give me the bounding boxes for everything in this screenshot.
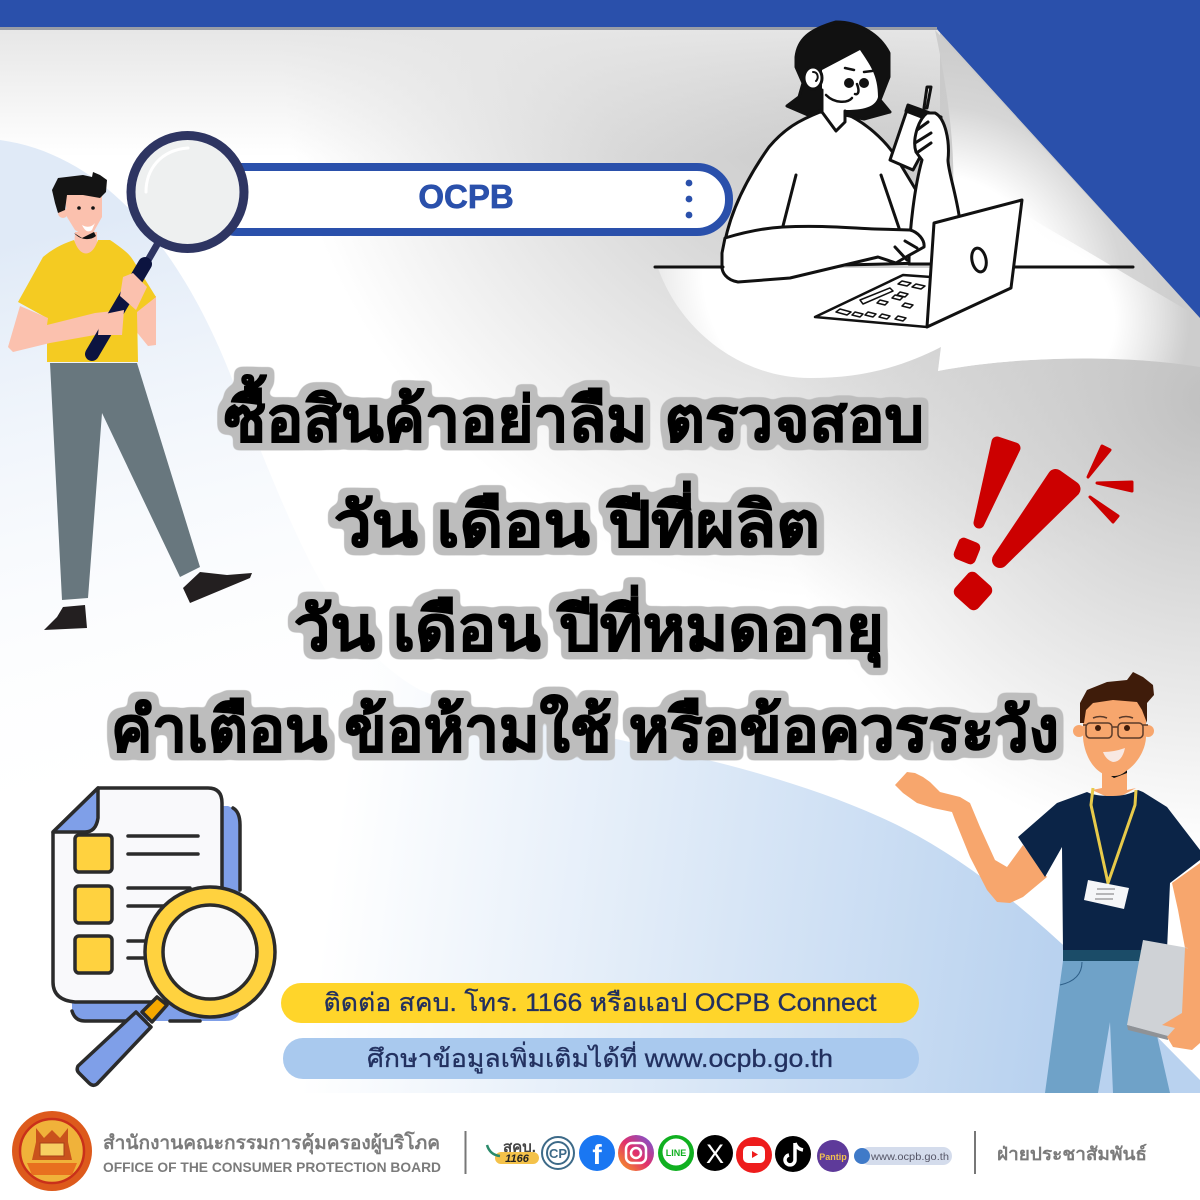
footer <box>0 1093 1200 1200</box>
raised arm <box>895 772 1047 903</box>
lanyard and badge <box>1091 788 1136 883</box>
icon: pantip: Pantip <box>819 1152 847 1162</box>
heading: ซื้อสินค้าอย่าลืม ตรวจสอบ <box>224 374 924 455</box>
shoes <box>44 572 252 630</box>
heading: วัน เดือน ปีที่ผลิต <box>334 481 820 560</box>
near arm <box>8 306 122 352</box>
icon: OCPB connect <box>542 1137 574 1169</box>
shirt <box>1018 790 1200 950</box>
head <box>1102 770 1127 778</box>
jeans <box>1045 961 1170 1093</box>
icon: line: LINE <box>666 1148 686 1158</box>
heading: คำเตือน ข้อห้ามใช้ หรือข้อควรระวัง <box>111 694 1059 765</box>
icon: checklist with magnifier <box>53 788 275 1085</box>
agency name English: OFFICE OF THE CONSUMER PROTECTION BOARD <box>103 1159 441 1175</box>
icon: OCPB seal <box>12 1111 92 1191</box>
top blue band and corner <box>0 0 1200 318</box>
page curl <box>658 30 1200 378</box>
yellow shirt <box>18 240 156 362</box>
website badge: www.ocpb.go.th <box>870 1152 949 1163</box>
website pill: ศึกษาข้อมูลเพิ่มเติมได้ที่ www.ocpb.go.th <box>367 1041 833 1074</box>
agency name Thai: สำนักงานคณะกรรมการคุ้มครองผู้บริโภค <box>103 1131 440 1155</box>
icon: exclamation marks <box>953 442 1132 611</box>
neck <box>1092 765 1136 800</box>
magnifier <box>92 136 244 354</box>
man with magnifying glass <box>8 136 252 630</box>
face <box>65 195 102 236</box>
waistband <box>1063 950 1167 961</box>
hands <box>98 273 147 335</box>
icon: youtube <box>736 1137 772 1173</box>
icon: tiktok <box>775 1136 811 1172</box>
icon: instagram <box>618 1135 654 1171</box>
search bar <box>205 167 729 232</box>
icon: line <box>658 1135 694 1171</box>
icon: pantip <box>817 1140 849 1172</box>
icon: X: X <box>706 1139 724 1169</box>
contact pill <box>281 983 919 1023</box>
contact pill: ติดต่อ สคบ. โทร. 1166 หรือแอป OCPB Connect <box>324 988 877 1017</box>
department name: ฝ่ายประชาสัมพันธ์ <box>997 1143 1147 1164</box>
tablet <box>1127 940 1188 1037</box>
icon: facebook <box>579 1135 615 1171</box>
hotline logo <box>487 1139 539 1165</box>
hand on tablet <box>1162 948 1200 1050</box>
icon: OCPB connect: CP <box>549 1146 567 1161</box>
blue wave background <box>0 140 1200 1093</box>
pants <box>50 363 200 600</box>
woman at laptop <box>655 22 1133 327</box>
heading <box>111 374 1059 765</box>
neck and far arm <box>74 232 156 346</box>
icon: facebook: f <box>592 1139 602 1170</box>
hotline logo: 1166 <box>505 1153 530 1165</box>
man with tablet <box>895 672 1200 1093</box>
website badge <box>854 1147 952 1165</box>
hair <box>52 172 107 213</box>
hotline logo: สคบ. <box>503 1139 536 1156</box>
far arm <box>1172 863 1200 1030</box>
website pill <box>283 1038 919 1079</box>
icon: X <box>697 1135 733 1171</box>
heading: วัน เดือน ปีที่หมดอายุ <box>294 585 884 667</box>
search bar label: OCPB <box>418 178 514 215</box>
